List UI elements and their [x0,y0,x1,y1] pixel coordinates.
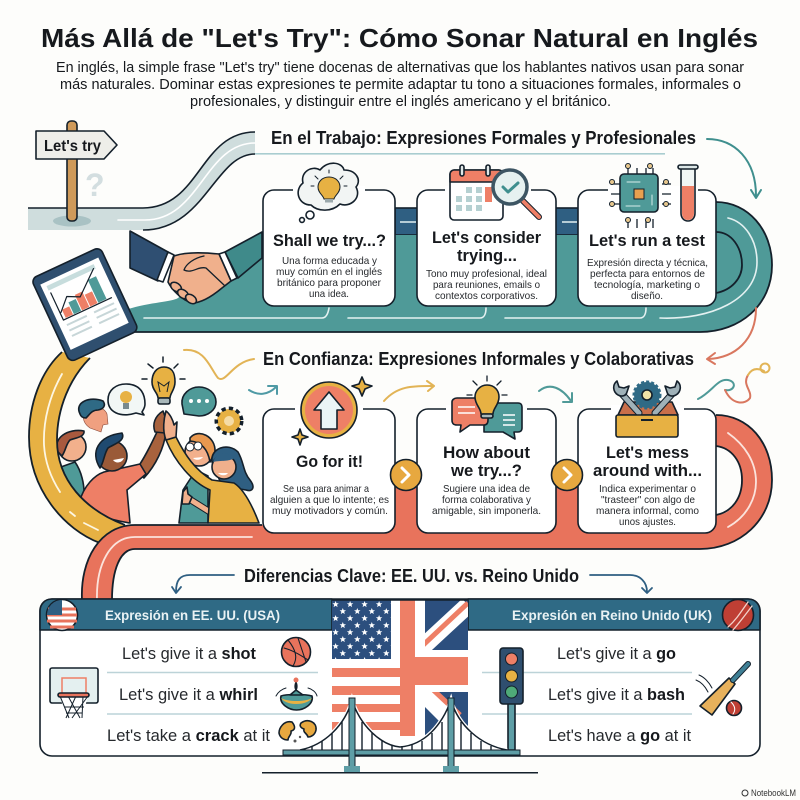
icon: thought bubble with lightbulb [298,163,358,222]
icon: chat bubble [182,387,216,416]
person: dark skin raising hand [79,411,166,523]
panel: Go for it: Go for it! [296,452,363,471]
panel: Let's run a test: Let's run a test [589,231,705,250]
arrow: to UK column [590,575,652,593]
panel: Let's mess around with: manera informal, como [596,505,699,517]
rows: UK: Let's give it a go [557,644,676,663]
icon: basketball hoop [50,668,98,718]
panel: Let's consider trying: Tono muy profesional, ideal [426,268,547,280]
intro text: En inglés, la simple frase "Let's try" tiene docenas de alternativas que los hablantes nativos usan para sonar [56,60,744,76]
panel: Let's run a test: tecnología, marketing o [594,279,700,291]
decorative arrow: blue [249,386,277,394]
floating head [79,399,108,432]
teal road [125,202,772,332]
icon: spinning top [276,678,317,710]
arrow: to the red road [707,308,756,364]
person: woman in yellow raising hand [164,411,259,523]
rows: UK: Let's give it a bash [548,685,685,704]
table header: UK: Expresión en Reino Unido (UK) [512,607,712,623]
decorative arrow: yellow [384,381,434,401]
rows: USA: Let's give it a shot [122,644,256,663]
rows: USA: Let's give it a whirl [119,685,258,704]
panel: Let's consider trying [417,165,556,306]
panel: Shall we try: muy común en el inglés [276,266,382,278]
intro text: profesionales, y distinguir entre el inglés americano y el británico. [190,94,611,110]
panel: How about we try [417,376,556,533]
red road [82,415,772,600]
panel: Shall we try [263,163,395,306]
signpost: Let's try: Let's try [44,138,101,155]
icon: tablet with chart [31,247,139,362]
panel: Shall we try: una idea. [309,288,349,300]
heading: En el Trabajo: En el Trabajo: Expresiones Formales y Profesionales [271,128,696,148]
icon: circuit chip [610,164,671,228]
decorative arrow: teal [539,387,572,402]
panel: Go for it: muy motivadors y común. [272,505,388,517]
panel: comparison table [40,599,760,756]
panel: Shall we try: británico para proponer [277,277,381,289]
icon: calendar and magnifier [450,165,539,220]
panel: Let's mess around with: Indica experimentar o [599,483,696,495]
table header: USA: Expresión en EE. UU. (USA) [105,607,280,623]
panel: Let's mess around with: Let's mess [606,443,689,462]
icon: basketball [282,638,310,666]
centre flags [332,600,468,745]
icon: gear [217,409,241,433]
rows: UK [482,644,692,745]
icon: chevron connector 1 [390,460,422,490]
icon: traffic light [500,648,523,750]
person: glasses [179,434,215,523]
panel: Go for it: alguien a que lo intente; es [270,494,389,506]
panel: How about we try: How about [443,443,530,462]
icon: up arrow medallion [292,377,372,445]
intro text: más naturales. Dominar estas expresiones te permite adaptar tu tono a situaciones formales, informales o [60,77,741,93]
orange road [29,352,125,543]
panel: Let's consider trying: trying... [457,246,517,265]
icon: large lightbulb [142,357,185,404]
people celebrating [57,411,259,523]
signpost: Let's try [36,121,117,226]
icon: toolbox with wrenches and gear [614,381,680,437]
panel: Let's run a test: perfecta para entornos de [590,268,705,280]
icon: round US flag [46,600,78,630]
panel: Let's run a test: Expresión directa y técnica, [587,257,708,269]
panel: Shall we try: Shall we try...? [273,231,386,250]
panel: Let's consider trying: contextos corporativos. [435,290,538,302]
icon: test tube [678,165,698,221]
panel: Let's mess around with: "trasteer" con algo de [601,494,695,506]
panel: Go for it [263,377,395,533]
bridge [262,698,538,774]
panel: How about we try: we try...? [450,461,522,480]
table header: USA [40,599,332,630]
US flag [332,600,400,745]
panel: Let's mess around with [578,381,716,533]
icon: chat bubbles with lightbulb [452,376,522,439]
rows: USA: Let's take a crack at it [107,726,270,745]
handshake [130,231,262,306]
table header: UK [468,599,760,630]
icon: cricket ball header [722,600,754,630]
title: Más Allá de "Let's Try": Cómo Sonar Natural en Inglés [41,23,758,53]
panel: Let's consider trying: para reuniones, emails o [433,279,540,291]
panel: How about we try: amigable, sin imponerla. [432,505,541,517]
icon: cracked nut [279,721,316,742]
panel: Let's run a test [578,164,716,306]
heading: Diferencias Clave: Diferencias Clave: EE. UU. vs. Reino Unido [244,566,579,586]
panel: How about we try: Sugiere una idea de [443,483,530,495]
person: back left [57,430,86,506]
UK flag [400,600,468,740]
icon: speech bubble with bulb [108,384,145,415]
rows: UK: Let's have a go at it [548,726,691,745]
icon: chevron connector 2 [552,460,582,490]
decorative arrow: yellow squiggle [184,350,254,379]
arrow: to USA column [172,575,234,593]
panel: Let's mess around with: unos ajustes. [619,516,676,528]
panel: Let's run a test: diseño. [631,290,663,302]
grey starting road [28,132,255,230]
arrow: to the teal road [707,139,761,198]
panel: Let's mess around with: around with... [593,461,702,480]
decorative squiggles [698,364,770,403]
icon: cricket bat and ball [696,664,748,716]
icon: question mark: ? [85,167,105,203]
panel: How about we try: forma colaborativa y [442,494,532,506]
panel: Shall we try: Una forma educada y [282,255,378,267]
panel: Go for it: Se usa para animar a [283,483,369,495]
intro text [56,60,744,110]
heading: En Confianza: En Confianza: Expresiones Informales y Colaborativas [263,349,694,369]
rows: USA [107,644,318,745]
panel: Let's consider trying: Let's consider [432,228,541,247]
